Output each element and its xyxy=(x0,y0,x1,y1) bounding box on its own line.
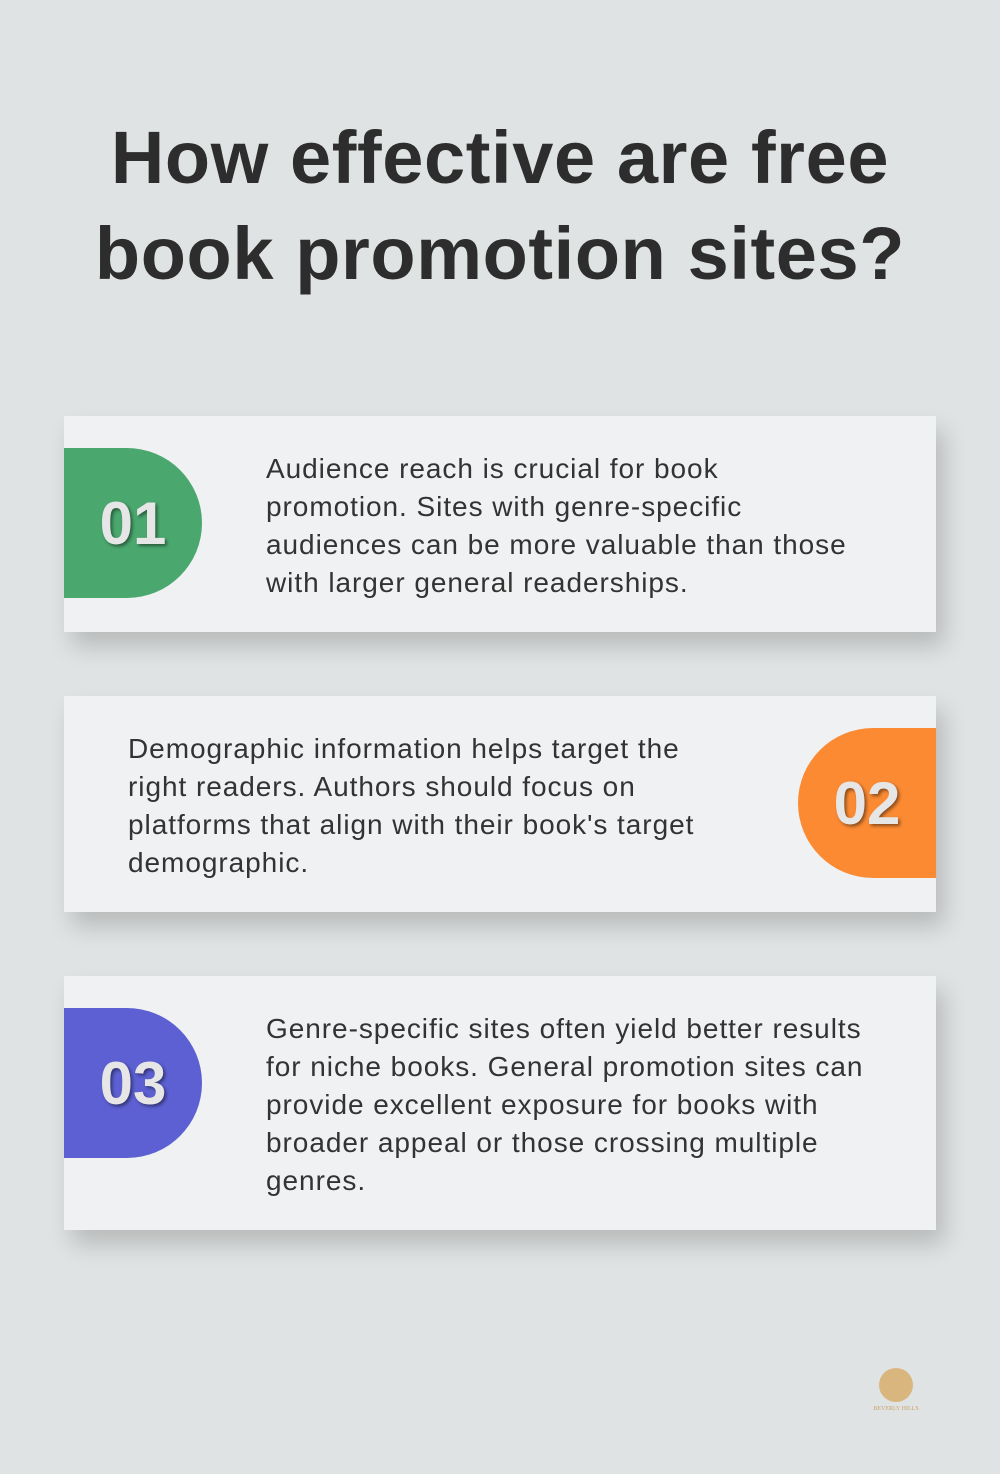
logo xyxy=(873,1368,919,1412)
text 3 xyxy=(266,1013,863,1196)
title: book promotion sites? xyxy=(95,212,905,295)
text 2: demographic. xyxy=(128,847,309,878)
text 3: Genre-specific sites often yield better results xyxy=(266,1013,862,1044)
badge 03: 03 xyxy=(100,1050,166,1116)
badge 01: 01 xyxy=(100,490,166,556)
logo: BEVERLY HILLS xyxy=(873,1406,919,1412)
text 2 xyxy=(128,733,694,878)
text 1 xyxy=(266,453,847,598)
text 3: provide excellent exposure for books with xyxy=(266,1089,819,1120)
panel: card 2 xyxy=(64,696,936,912)
text 1: Audience reach is crucial for book xyxy=(266,453,719,484)
text 3: for niche books. General promotion sites can xyxy=(266,1051,863,1082)
text 2: platforms that align with their book's target xyxy=(128,809,694,840)
badge 03 xyxy=(64,1008,202,1158)
text 1: promotion. Sites with genre-specific xyxy=(266,491,742,522)
text 1: audiences can be more valuable than those xyxy=(266,529,847,560)
title xyxy=(95,116,905,295)
badge 02: 02 xyxy=(834,770,900,836)
text 1: with larger general readerships. xyxy=(266,567,689,598)
text 3: genres. xyxy=(266,1165,366,1196)
panel: card 3 xyxy=(64,976,936,1230)
panel: card 1 xyxy=(64,416,936,632)
text 3: broader appeal or those crossing multiple xyxy=(266,1127,819,1158)
title: How effective are free xyxy=(111,116,889,199)
text 2: right readers. Authors should focus on xyxy=(128,771,636,802)
text 2: Demographic information helps target the xyxy=(128,733,680,764)
badge 01 xyxy=(64,448,202,598)
badge 02 xyxy=(798,728,936,878)
